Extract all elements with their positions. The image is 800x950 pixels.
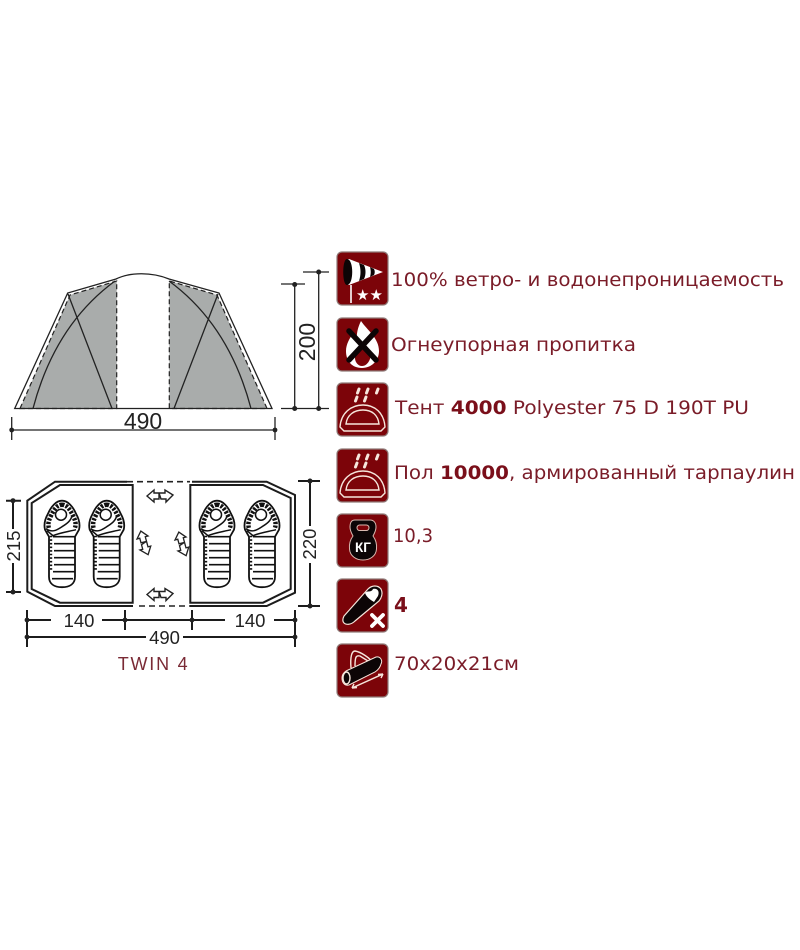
icon: rain on dome, flysheet bbox=[337, 383, 388, 436]
tent grey right panel bbox=[169, 281, 267, 408]
dimension: 140 and 140: 140 bbox=[64, 610, 94, 631]
door arrows bottom bbox=[147, 588, 173, 600]
dimension: 220: 220 bbox=[299, 529, 320, 559]
icon: kettlebell weight bbox=[337, 514, 388, 567]
right sleeping compartment bbox=[190, 482, 295, 606]
dimension: 215 bbox=[3, 498, 24, 594]
dimension: 140 and 140 bbox=[25, 610, 297, 631]
dimension: height 200 bbox=[281, 270, 329, 411]
icon: windsock bbox=[337, 252, 388, 305]
text: flysheet spec: Тент 4000 Polyester 75 D 190T PU bbox=[394, 397, 749, 419]
dimension: total 490: 490 bbox=[149, 627, 180, 648]
dimension: total 490 bbox=[25, 627, 297, 648]
sleeping bag 4 bbox=[244, 501, 280, 587]
tent floor plan bbox=[27, 482, 295, 606]
text: fireproof treatment: Огнеупорная пропитка bbox=[391, 334, 636, 356]
icon: fire resistant bbox=[337, 318, 388, 371]
dimension: 215: 215 bbox=[3, 531, 24, 561]
tent side view diagram bbox=[15, 274, 272, 408]
dimension: height 200: 200 bbox=[294, 323, 320, 361]
tent poles bbox=[33, 281, 251, 408]
sleeping bag 3 bbox=[199, 501, 235, 587]
text: weight: 10,3 bbox=[393, 525, 433, 547]
sleeping bag 1 bbox=[44, 501, 80, 587]
left sleeping compartment bbox=[27, 482, 133, 606]
door arrows top bbox=[147, 490, 173, 502]
sleeping bag 2 bbox=[89, 501, 124, 587]
icon: sleeping bag capacity bbox=[337, 579, 388, 632]
dimension: 220 bbox=[298, 478, 320, 608]
door arrows left bbox=[135, 530, 153, 556]
model name: TWIN 4 bbox=[118, 654, 188, 674]
dimension: width 490 bbox=[9, 408, 277, 440]
icon: kettlebell weight: КГ bbox=[355, 540, 371, 555]
text: floor spec: Пол 10000, армированный тарпаулин bbox=[394, 462, 795, 484]
dimension: 140 and 140: 140 bbox=[235, 610, 265, 631]
tent grey left panel bbox=[20, 281, 117, 408]
icon: carry bag bbox=[337, 644, 388, 697]
icon: rain on dome, floor bbox=[337, 449, 388, 502]
vestibule dashed outline bbox=[127, 482, 190, 606]
text: capacity: 4 bbox=[394, 593, 408, 617]
dimension: width 490: 490 bbox=[124, 408, 162, 434]
text: wind and water resistance: 100% ветро- и водонепроницаемость bbox=[391, 269, 784, 291]
tent outer silhouette bbox=[15, 274, 272, 408]
text: packed size: 70x20x21см bbox=[394, 653, 519, 675]
icon: windsock: ★★ bbox=[356, 286, 383, 304]
door arrows right bbox=[173, 531, 191, 557]
